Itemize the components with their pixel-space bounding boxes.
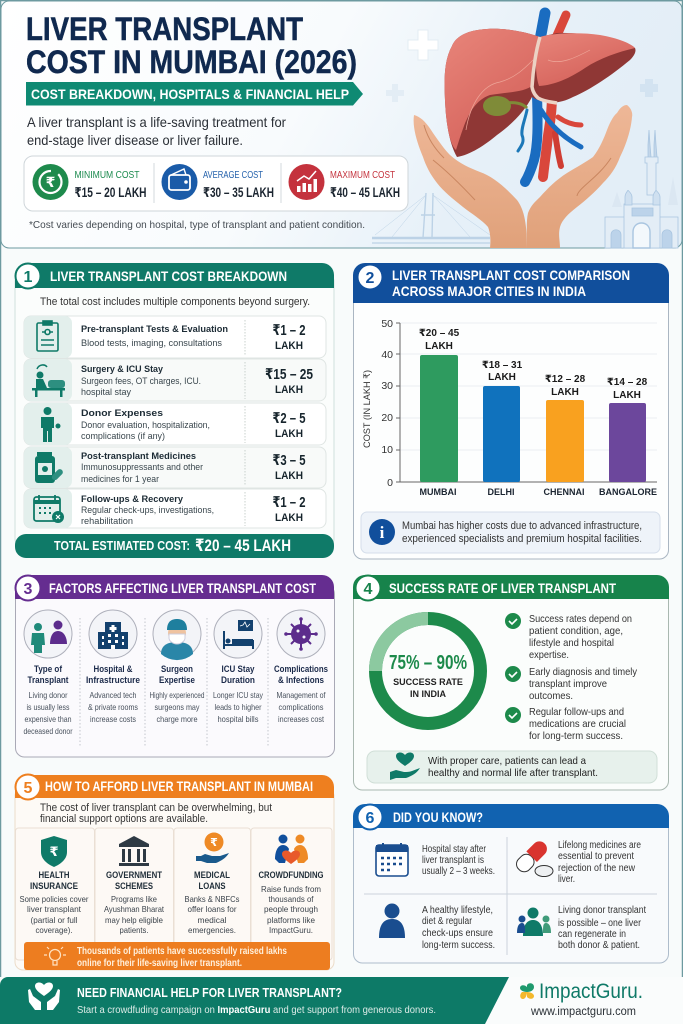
fact: healthy lifestyle: check-ups ensure — [422, 928, 494, 939]
fact: healthy lifestyle — [379, 904, 495, 951]
card: crowdfunding: Raise funds from — [261, 884, 321, 894]
fact: lifelong medicines: rejection of the new — [558, 863, 636, 874]
success point 3 — [505, 707, 626, 742]
row: donor expenses: LAKH — [275, 428, 303, 440]
bar chart: 50 — [381, 318, 393, 330]
bar chart: ₹18 – 31 — [482, 360, 523, 371]
fact: hospital stay: usually 2 – 3 weeks. — [422, 866, 495, 877]
row: surgery and ICU: Surgeon fees, OT charges, ICU. — [81, 376, 201, 386]
total cost bar — [15, 534, 334, 558]
row: donor expenses: Donor Expenses — [81, 408, 163, 419]
factor: ICU stay — [213, 610, 264, 724]
bar chart: ₹14 – 28 — [607, 377, 648, 388]
heading 6: 6 — [366, 810, 375, 827]
fact: living donor: both donor & patient. — [558, 940, 640, 951]
factor: complications: increases cost — [278, 714, 325, 724]
row: follow-ups: ₹1 – 2 — [272, 494, 306, 511]
stat: average cost — [203, 170, 274, 200]
fact: hospital stay: liver transplant is — [422, 855, 484, 866]
factor: ICU stay: Duration — [221, 675, 255, 686]
factor: type of transplant: Type of — [34, 664, 63, 675]
factor: hospital: Advanced tech — [90, 690, 137, 700]
row: donor expenses: ₹2 – 5 — [272, 410, 306, 427]
heading 5: 5 — [24, 780, 33, 797]
fact: living donor: is possible – one liver — [558, 918, 642, 929]
row: follow-ups: LAKH — [275, 512, 303, 524]
icon: medical crosses — [386, 30, 658, 102]
card: government schemes: Ayushman Bharat — [104, 904, 165, 914]
bar chart: 10 — [381, 444, 393, 456]
factor: ICU stay: leads to higher — [214, 702, 262, 712]
row: surgery and ICU: ₹15 – 25 — [265, 366, 313, 383]
factor: surgeon: charge more — [156, 714, 198, 724]
row: post-transplant medicines: ₹3 – 5 — [272, 452, 306, 469]
factor: complications — [274, 610, 328, 724]
fact: healthy lifestyle: diet & regular — [422, 916, 473, 927]
icon: medicine bottle — [35, 452, 64, 483]
card: medical loans: ₹ — [210, 837, 218, 849]
ImpactGuru logo: ImpactGuru. — [539, 980, 643, 1003]
bar chart — [362, 318, 657, 497]
factor: type of transplant: is usually less — [26, 702, 70, 712]
factor: hospital — [86, 610, 140, 724]
intro sentence: The cost of liver transplant can be overwhelming, but — [40, 802, 272, 814]
info note: Mumbai has higher costs due to advanced infrastructure, — [402, 520, 642, 532]
heading 2: LIVER TRANSPLANT COST COMPARISON — [392, 267, 630, 283]
bar chart: 30 — [381, 380, 393, 392]
factor: surgeon: surgeons may — [154, 702, 200, 712]
factor: type of transplant: Transplant — [28, 675, 69, 686]
factor: surgeon — [150, 610, 205, 724]
stat: maximum cost: MAXIMUM COST — [330, 170, 395, 181]
row: post-transplant medicines: LAKH — [275, 470, 303, 482]
card: medical loans: medical — [198, 915, 227, 925]
heading 3: FACTORS AFFECTING LIVER TRANSPLANT COST — [49, 580, 316, 596]
illustration: vessels below liver — [525, 95, 581, 182]
callout: healthy life — [367, 751, 657, 783]
factor: surgeon: Expertise — [159, 675, 195, 686]
card: crowdfunding: CROWDFUNDING — [258, 870, 324, 880]
total cost bar: TOTAL ESTIMATED COST: — [54, 539, 190, 553]
donut chart: 75% – 90% — [389, 652, 467, 674]
row: pre-transplant tests — [24, 316, 326, 358]
row: pre-transplant tests: ₹1 – 2 — [272, 322, 306, 339]
bar chart: COST (IN LAKH ₹) — [362, 370, 372, 448]
fact: living donor: Living donor transplant — [558, 905, 646, 916]
factor: complications: & Infections — [278, 675, 324, 686]
heading 5 — [15, 774, 334, 800]
icon: minimum cost: ₹ — [46, 174, 56, 190]
icon: hands holding heart — [28, 982, 60, 1010]
success point 3: for long-term success. — [529, 731, 623, 742]
bar chart: LAKH — [551, 387, 579, 398]
row: surgery and ICU: Surgery & ICU Stay — [81, 364, 164, 375]
card: health insurance: coverage). — [36, 925, 72, 935]
card: crowdfunding: thousands of — [268, 894, 314, 904]
icon: donor — [41, 407, 60, 442]
panel 4: success rate — [353, 575, 669, 790]
success point 1 — [505, 613, 632, 661]
footer call to action: Start a crowdfuding campaign on ImpactGuru and get support from generous donors. — [77, 1005, 436, 1016]
bar chart: 20 — [381, 412, 393, 424]
bar chart: LAKH — [425, 341, 453, 352]
stat: minimum cost: ₹15 – 20 LAKH — [74, 185, 146, 200]
intro text: A liver transplant is a life-saving treatment for — [27, 114, 286, 130]
intro sentence — [40, 802, 272, 825]
card: crowdfunding: people through — [264, 904, 318, 914]
row: donor expenses: Donor evaluation, hospitalization, — [81, 420, 210, 430]
cost footnote: *Cost varies depending on hospital, type of transplant and patient condition. — [29, 219, 365, 231]
factor: ICU stay: hospital bills — [218, 714, 258, 724]
bar chart: MUMBAI — [420, 487, 456, 497]
success point 2: outcomes. — [529, 691, 573, 702]
factor: complications: Management of — [276, 690, 326, 700]
card: medical loans — [174, 828, 250, 960]
ImpactGuru logo — [520, 980, 643, 1018]
row: follow-ups: Regular check-ups, investigations, — [81, 505, 214, 515]
icon: maximum cost — [288, 164, 324, 200]
illustration: Mumbai gateway and tower — [605, 130, 678, 248]
title — [26, 11, 357, 80]
info note — [361, 512, 660, 553]
icon: calendar check — [34, 495, 64, 523]
card: crowdfunding: ImpactGuru. — [269, 925, 313, 935]
donut chart — [376, 618, 480, 724]
total cost bar: ₹20 – 45 LAKH — [195, 536, 291, 555]
success point 1: lifestyle and hospital — [529, 638, 614, 649]
bar chart: ₹20 – 45 — [419, 328, 460, 339]
card: medical loans: MEDICAL — [194, 870, 230, 880]
factor: type of transplant: expensive than — [24, 714, 72, 724]
cost summary card — [24, 156, 408, 211]
card: government schemes: SCHEMES — [115, 881, 153, 891]
card: health insurance: (partial or full — [30, 915, 78, 925]
factor: ICU stay: ICU Stay — [222, 664, 255, 675]
stat: maximum cost — [330, 170, 400, 200]
intro text: end-stage liver disease or liver failure. — [27, 132, 243, 148]
panel 5: affording transplant — [15, 774, 334, 970]
bar chart: BANGALORE — [599, 487, 657, 497]
bar chart: LAKH — [488, 372, 516, 383]
fact: healthy lifestyle: long-term success. — [422, 940, 495, 951]
card: government schemes: Programs like — [111, 894, 157, 904]
stat: minimum cost — [74, 170, 146, 200]
row: follow-ups — [24, 489, 326, 528]
card: government schemes — [95, 828, 174, 960]
panel 3: cost factors — [15, 575, 334, 757]
heading 6 — [353, 804, 669, 830]
card: government schemes: GOVERNMENT — [106, 870, 162, 880]
factor: type of transplant: Living donor — [28, 690, 68, 700]
heading 2 — [353, 263, 669, 303]
heading 1: 1 — [24, 269, 33, 286]
card: health insurance: INSURANCE — [30, 881, 78, 891]
fact: lifelong medicines: liver. — [558, 874, 575, 885]
illustration: vessels above liver — [540, 13, 566, 40]
fact: healthy lifestyle: A healthy lifestyle, — [422, 905, 493, 916]
banner: success stories: Thousands of patients have successfully raised lakhs — [77, 946, 287, 957]
row: donor expenses: complications (if any) — [81, 431, 165, 441]
heading 3: 3 — [24, 581, 33, 598]
fact: hospital stay — [376, 843, 495, 877]
row: post-transplant medicines: medicines for 1 year — [81, 474, 159, 484]
success point 2: Early diagnosis and timely — [529, 667, 638, 678]
icon: clipboard — [37, 321, 58, 351]
subtitle ribbon: COST BREAKDOWN, HOSPITALS & FINANCIAL HELP — [31, 86, 349, 102]
title: COST IN MUMBAI (2026) — [26, 44, 357, 80]
row: donor expenses — [24, 403, 326, 445]
stat: minimum cost: MINIMUM COST — [74, 170, 140, 181]
bar chart: 40 — [381, 349, 393, 361]
card: health insurance — [16, 828, 94, 960]
panel 1: cost breakdown — [15, 263, 334, 558]
success point 2: transplant improve — [529, 679, 607, 690]
stat: average cost: AVERAGE COST — [203, 170, 263, 181]
card: health insurance: Some policies cover — [20, 894, 89, 904]
footer call to action: NEED FINANCIAL HELP FOR LIVER TRANSPLANT? — [77, 985, 342, 1000]
illustration: Mumbai sea link — [372, 193, 490, 243]
callout: healthy life: healthy and normal life after transplant. — [428, 767, 598, 779]
card: medical loans: emergencies. — [188, 925, 236, 935]
factor: surgeon: Surgeon — [161, 664, 193, 675]
row: follow-ups: rehabilitation — [81, 516, 133, 526]
title: LIVER TRANSPLANT — [26, 11, 303, 47]
success point 1: patient condition, age, — [529, 626, 623, 637]
icon: light bulb — [44, 947, 66, 965]
heading 2: ACROSS MAJOR CITIES IN INDIA — [392, 283, 586, 299]
factor: surgeon: Highly experienced — [150, 690, 205, 700]
donut chart: IN INDIA — [410, 689, 447, 699]
factor: hospital: Infrastructure — [86, 675, 140, 686]
fact: living donor: can regenerate in — [558, 929, 626, 940]
row: follow-ups: Follow-ups & Recovery — [81, 494, 184, 505]
card: medical loans: offer loans for — [188, 904, 237, 914]
bar chart: 0 — [387, 477, 393, 489]
icon: logo plus — [520, 983, 534, 999]
intro text — [27, 114, 286, 148]
illustration: cupped hands — [414, 105, 632, 248]
fact: living donor — [517, 905, 646, 951]
fact: lifelong medicines: essential to prevent — [558, 851, 634, 862]
success point 3: medications are crucial — [529, 719, 626, 730]
card: health insurance: liver transplant — [27, 904, 82, 914]
panel 2: city comparison — [353, 263, 669, 559]
stat: average cost: ₹30 – 35 LAKH — [203, 185, 274, 200]
panel 6: did you know — [353, 804, 669, 963]
card: health insurance: ₹ — [49, 844, 59, 859]
row: surgery and ICU: LAKH — [275, 384, 303, 396]
factor: complications: Complications — [274, 664, 328, 675]
card: crowdfunding — [251, 828, 332, 960]
bar chart: LAKH — [613, 390, 641, 401]
row: post-transplant medicines: Immunosuppressants and other — [81, 462, 203, 472]
fact: lifelong medicines — [514, 838, 641, 885]
row: pre-transplant tests: LAKH — [275, 340, 303, 352]
heading 4: 4 — [364, 581, 373, 598]
heading 5: HOW TO AFFORD LIVER TRANSPLANT IN MUMBAI — [45, 778, 313, 794]
callout: healthy life: With proper care, patients can lead a — [428, 755, 586, 767]
intro sentence: The total cost includes multiple components beyond surgery. — [40, 296, 310, 308]
success point 3: Regular follow-ups and — [529, 707, 624, 718]
heading 1: LIVER TRANSPLANT COST BREAKDOWN — [50, 268, 287, 284]
heading 3 — [15, 575, 334, 600]
success point 2 — [505, 666, 638, 702]
row: post-transplant medicines — [24, 447, 326, 488]
heading 4: SUCCESS RATE OF LIVER TRANSPLANT — [389, 580, 616, 596]
row: post-transplant medicines: Post-transplant Medicines — [81, 451, 196, 462]
info note: experienced specialists and premium hospital facilities. — [402, 533, 642, 545]
donut chart: SUCCESS RATE — [393, 677, 463, 687]
factor: hospital: & private rooms — [88, 702, 138, 712]
subtitle ribbon — [26, 82, 363, 106]
factor: ICU stay: Longer ICU stay — [213, 690, 264, 700]
footer call to action — [0, 977, 683, 1024]
bar chart: CHENNAI — [543, 487, 585, 497]
banner: success stories: online for their life-saving liver transplant. — [77, 958, 242, 969]
bar chart: DELHI — [488, 487, 514, 497]
card: government schemes: may help eligible — [105, 915, 163, 925]
icon: surgery table — [32, 365, 65, 397]
factor: hospital: Hospital & — [94, 664, 133, 675]
intro sentence: financial support options are available. — [40, 813, 208, 825]
factor: type of transplant: deceased donor — [24, 726, 73, 736]
card: medical loans: LOANS — [198, 881, 226, 891]
illustration: liver — [445, 29, 635, 157]
ImpactGuru logo: www.impactguru.com — [530, 1006, 636, 1018]
heading 2: 2 — [366, 270, 375, 287]
header banner — [1, 1, 682, 248]
fact: lifelong medicines: Lifelong medicines are — [558, 840, 641, 851]
icon: average cost — [162, 164, 198, 200]
heading 6: DID YOU KNOW? — [393, 809, 483, 825]
row: surgery and ICU: hospital stay — [81, 387, 131, 397]
fact: hospital stay: Hospital stay after — [422, 844, 487, 855]
banner: success stories — [24, 942, 330, 970]
factor: hospital: increase costs — [90, 714, 136, 724]
factor: type of transplant — [24, 610, 73, 736]
bar chart: ₹12 – 28 — [545, 374, 586, 385]
card: medical loans: Banks & NBFCs — [184, 894, 240, 904]
info note: i — [380, 523, 385, 542]
stat: maximum cost: ₹40 – 45 LAKH — [330, 185, 400, 200]
success point 1: Success rates depend on — [529, 614, 632, 625]
heading 1 — [15, 263, 334, 288]
row: pre-transplant tests: Blood tests, imaging, consultations — [81, 338, 222, 348]
success point 1: expertise. — [529, 650, 569, 661]
heading 4 — [353, 575, 669, 600]
card: government schemes: patients. — [120, 925, 148, 935]
card: health insurance: HEALTH — [38, 870, 70, 880]
icon: minimum cost — [32, 164, 68, 200]
row: surgery and ICU — [24, 359, 326, 401]
factor: complications: complications — [278, 702, 324, 712]
card: crowdfunding: platforms like — [267, 915, 315, 925]
row: pre-transplant tests: Pre-transplant Tests & Evaluation — [81, 324, 228, 335]
